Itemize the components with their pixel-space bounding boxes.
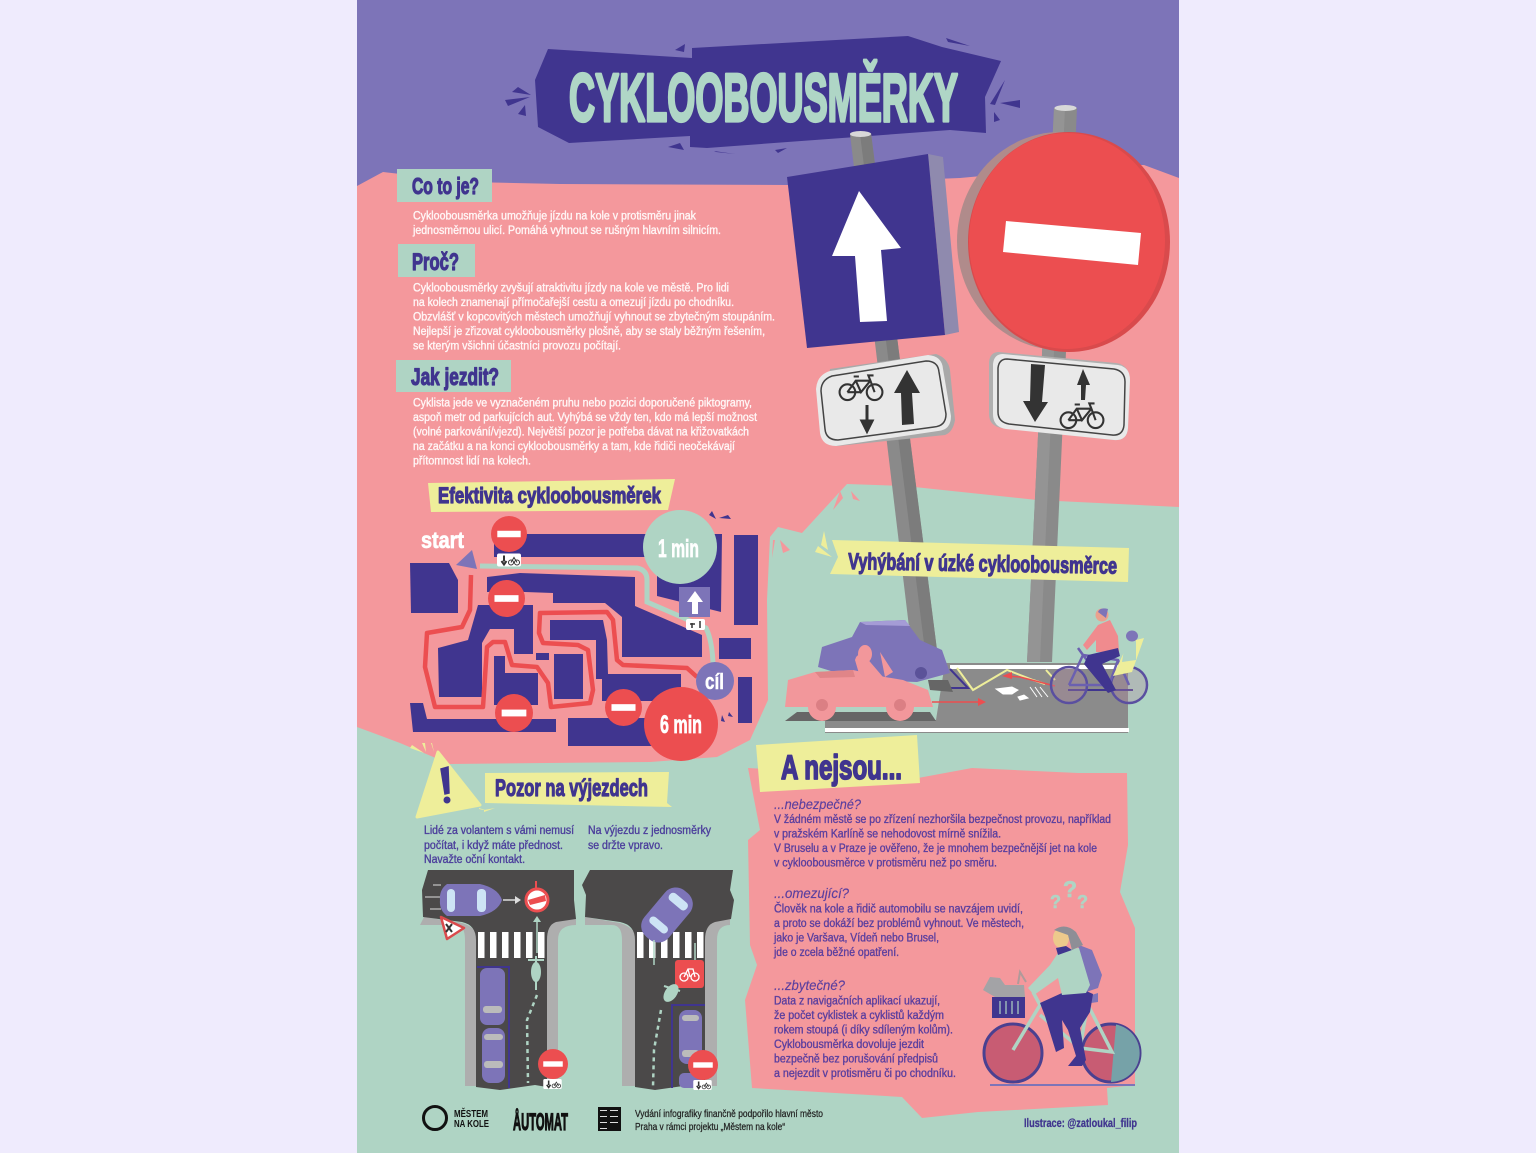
text block: left advice: Navažte oční kontakt. <box>424 854 525 866</box>
road <box>785 663 1133 733</box>
text block: nebezpečné: V Bruselu a v Praze je ověřeno, že je mnohem bezpečnější jet na kole <box>774 843 1097 855</box>
heading: proč: Proč? <box>412 249 459 276</box>
crosswalk <box>478 932 544 958</box>
heading: a nejsou <box>756 735 920 792</box>
panel: proč <box>398 244 775 352</box>
title: CYKLOOBOUSMĚRKY <box>569 59 958 136</box>
text block: omezující: jako je Varšava, Vídeň nebo Brusel, <box>773 932 939 944</box>
text block: reasons: Cykloobousměrky zvyšují atraktivitu jízdy na kole ve městě. Pro lidi <box>413 282 729 294</box>
panel: a nejsou <box>745 735 1140 1118</box>
text block: omezující <box>773 885 1024 959</box>
sign: one way <box>787 154 959 348</box>
heading: vyhýbání <box>815 531 1129 582</box>
icon: small up arrow <box>1077 369 1090 400</box>
text block: zbytečné: rokem stoupá (i díky sdíleným kolům). <box>774 1024 953 1036</box>
text block: funding note: Praha v rámci projektu „Městem na kole“ <box>635 1122 785 1133</box>
heading: efektivita <box>428 479 675 512</box>
panel: pink upper background <box>357 165 1179 764</box>
text block: nebezpečné: ...nebezpečné? <box>774 796 861 812</box>
sign post: left <box>850 131 937 652</box>
icon: no entry with sub sign <box>688 1050 718 1090</box>
parking bay with cars <box>672 1005 705 1088</box>
callout: 6 min: 6 min <box>660 711 702 739</box>
diagram: exit without priority <box>420 870 576 1090</box>
text block: definition: jednosměrnou ulicí. Pomáhá vyhnout se rušným hlavním silnicím. <box>412 225 721 237</box>
icon: small down arrow <box>862 405 872 431</box>
supplementary sign: left <box>816 354 955 446</box>
text block: riding advice: přítomnost lidí na kolech. <box>413 456 531 468</box>
child seat <box>1113 638 1144 676</box>
text block: omezující: a proto se dokáží bez problémů vyhnout. Ve městech, <box>774 918 1024 930</box>
icon: white bar <box>1003 221 1141 265</box>
heading: pozor: Pozor na výjezdech <box>495 775 648 802</box>
question marks: ? <box>1077 892 1088 912</box>
diagram: keep right at exit <box>582 870 734 1090</box>
icon: no entry <box>605 689 642 726</box>
text block: nebezpečné: v cykloobousměrce v protisměru než po směru. <box>774 858 997 870</box>
icon: bicycle <box>840 375 882 400</box>
text block: reasons: Obzvlášť v kopcovitých městech umožňují vyhnout se zbytečným stoupáním. <box>413 312 775 324</box>
text block: reasons: Nejlepší je zřizovat cykloobousměrky plošně, aby se staly běžným řešením, <box>413 326 765 338</box>
heading: vyhýbání: Vyhýbání v úzké cykloobousměrce <box>848 548 1117 579</box>
text block: zbytečné: bezpečně bez porušování předpisů <box>774 1054 938 1066</box>
seat <box>1082 993 1098 1004</box>
title banner <box>505 36 1020 154</box>
backpack <box>1075 945 1102 992</box>
text block: omezující: Člověk na kole a řidič automobilu se navzájem uvidí, <box>774 902 1023 916</box>
text block: left advice: počítat, i když máte přednost. <box>424 840 563 852</box>
text block: riding advice: Cyklista jede ve vyznačeném pruhu nebo pozici doporučené piktogramy, <box>413 398 752 410</box>
text block: right advice <box>588 825 711 852</box>
wheels <box>984 1024 1140 1086</box>
text block: zbytečné <box>774 977 956 1080</box>
text block: riding advice: (volné parkování/vjezd). Největší pozor je potřeba dávat na křižovatkách <box>413 426 749 438</box>
text block: reasons: se kterým všichni účastníci provozu počítají. <box>413 340 621 352</box>
panel: mint lower background <box>357 480 1179 1153</box>
car: angled <box>635 882 699 948</box>
parking bay with cars <box>477 967 509 1088</box>
car: pink convertible with driver <box>785 645 933 721</box>
rider <box>1083 620 1119 652</box>
icon: no entry <box>488 580 525 617</box>
text block: nebezpečné: v pražském Karlíně se nehodovost mírně snížila. <box>774 828 1001 840</box>
text block: zbytečné: ...zbytečné? <box>774 977 845 993</box>
text block: zbytečné: Cyklobousměrka dovoluje jezdit <box>774 1039 925 1051</box>
question marks <box>1050 876 1088 912</box>
question marks: ? <box>1063 876 1077 902</box>
heading: a nejsou: A nejsou... <box>781 749 902 787</box>
illustration: woman cycling with cat <box>983 876 1140 1086</box>
text block: illustration credit: Ilustrace: @zatloukal_filip <box>1024 1116 1137 1130</box>
pants <box>1040 990 1093 1066</box>
icon: big up arrow <box>894 370 920 425</box>
text block: funding note: Vydání infografiky finančně podpořilo hlavní město <box>635 1109 823 1120</box>
frame <box>1013 992 1112 1052</box>
illustration: cyclist with child <box>1051 608 1147 703</box>
head and hair <box>1053 926 1083 955</box>
sign post: right <box>1027 105 1077 662</box>
text block: reasons: na kolech znamenají přímočařejší cestu a omezují jízdu po chodníku. <box>413 297 734 309</box>
cyclist and path <box>527 916 544 1083</box>
heading: jak jezdit: Jak jezdit? <box>411 364 499 391</box>
callout: 1 min <box>643 510 717 584</box>
route: 6 minutes <box>425 575 697 707</box>
sign: no entry <box>957 132 1170 352</box>
callout: 6 min <box>644 687 718 761</box>
logo: městem na kole <box>424 1106 489 1130</box>
text block: nebezpečné <box>774 796 1111 870</box>
icon: warning triangle <box>410 743 495 817</box>
label: start: start <box>421 527 464 553</box>
icon: one way sign <box>679 587 710 630</box>
panel: poster background <box>357 0 1179 1153</box>
text block: right advice: Na výjezdu z jednosměrky <box>588 825 711 837</box>
icon: red bike sign <box>675 960 704 988</box>
text: ÅUTOMAT <box>513 1108 568 1136</box>
text block: zbytečné: Data z navigačních aplikací ukazují, <box>774 996 940 1008</box>
illustration: narrow street passing <box>785 608 1147 733</box>
heading: jak jezdit <box>396 360 511 392</box>
text block: left advice: Lidé za volantem s vámi nemusí <box>424 825 575 837</box>
jacket and arm <box>1028 948 1090 995</box>
chart: route map <box>410 510 758 761</box>
callout: cíl <box>696 662 734 700</box>
text block: definition <box>412 210 721 237</box>
car: purple <box>818 620 953 692</box>
heading: efektivita: Efektivita cykloobousměrek <box>438 483 662 508</box>
icon: white arrow <box>832 191 901 322</box>
panel: jak jezdit <box>396 360 758 468</box>
text block: riding advice: na začátku a na konci cykloobousměrky a tam, kde řidiči neočekávají <box>413 441 736 453</box>
text block: definition: Cykloobousměrka umožňuje jízdu na kole v protisměru jinak <box>413 210 696 222</box>
supplementary sign: right <box>989 352 1130 440</box>
heading: co to je: Co to je? <box>412 173 479 199</box>
text block: zbytečné: že počet cyklistek a cyklistů každým <box>774 1010 944 1022</box>
panel: co to je <box>397 169 721 237</box>
icon: no entry with sub sign <box>538 1049 568 1089</box>
crosswalk <box>637 932 704 958</box>
arrows: clearance <box>932 672 1055 706</box>
text block: left advice <box>424 825 575 866</box>
logo: městem na kole: MĚSTEM <box>454 1107 488 1120</box>
icon: no entry with sub sign <box>491 516 527 566</box>
logo: městem na kole: NA KOLE <box>454 1119 489 1130</box>
question marks: ? <box>1050 892 1061 912</box>
icon: no entry <box>495 694 533 732</box>
text block: omezující: jde o zcela běžné opatření. <box>773 947 899 959</box>
cyclist and path <box>653 981 682 1087</box>
heading: proč <box>398 244 475 277</box>
car: crossing <box>425 884 521 916</box>
city blocks <box>410 534 758 746</box>
text block: omezující: ...omezující? <box>774 885 849 901</box>
heading: co to je <box>397 169 492 202</box>
arrows <box>654 940 695 970</box>
icon: give way triangle <box>441 917 464 939</box>
text block: funding note <box>635 1109 823 1133</box>
text block: reasons <box>413 282 775 352</box>
basket with cat <box>983 972 1026 1018</box>
heading: pozor <box>485 772 672 807</box>
logo: praha <box>598 1107 621 1131</box>
callout: cíl: cíl <box>705 669 724 694</box>
icon: bicycle <box>1061 403 1103 428</box>
text block: right advice: se držte vpravo. <box>588 840 663 852</box>
icon: start arrow <box>456 550 477 569</box>
route: 1 minute <box>480 566 713 663</box>
road and curbs <box>582 870 734 1090</box>
icon: red no-entry symbol <box>526 881 548 911</box>
callout: 1 min: 1 min <box>658 535 699 563</box>
text block: riding advice: aspoň metr od parkujících aut. Vyhýbá se vždy ten, kdo má lepší možnost <box>413 412 758 424</box>
text block: zbytečné: a nejezdit v protisměru či po chodníku. <box>774 1068 956 1080</box>
icon: big down arrow <box>1023 364 1048 422</box>
road and curbs <box>420 870 576 1090</box>
text block: riding advice <box>413 398 758 468</box>
text block: nebezpečné: V žádném městě se po zřízení nezhoršila bezpečnost provozu, například <box>774 814 1111 826</box>
